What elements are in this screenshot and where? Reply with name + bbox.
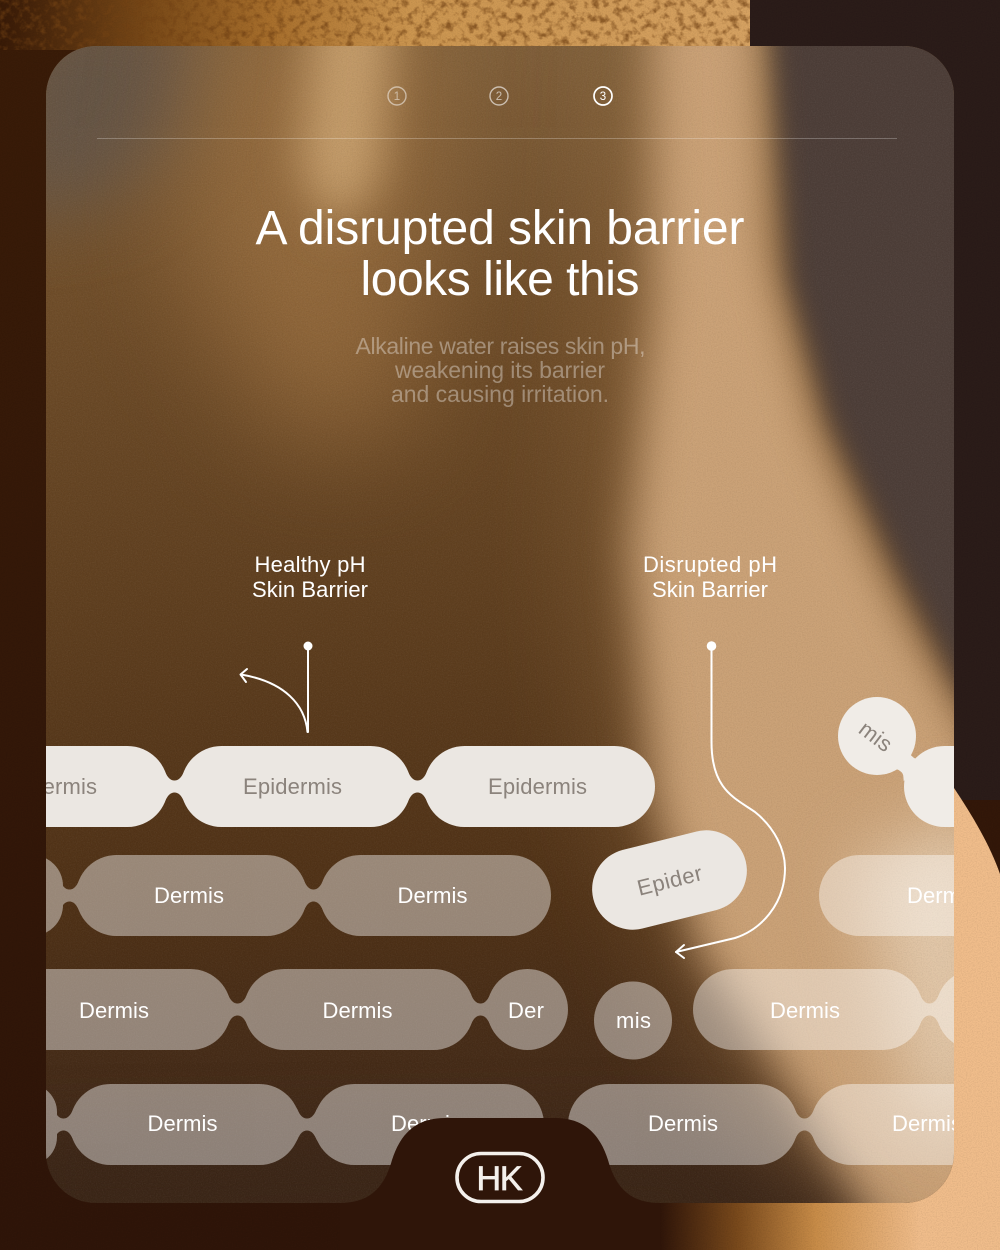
step indicator [388, 87, 612, 105]
label: disrupted pH [644, 556, 776, 597]
broken epidermis cluster: mis [854, 716, 897, 757]
row 3: dermis pills: Der [508, 998, 544, 1023]
row 1: epidermis pills: Epidermis [0, 774, 97, 799]
subtitle [356, 333, 646, 407]
detached epidermis pill: Epider [635, 860, 705, 901]
label: healthy pH: Healthy pH [254, 552, 366, 577]
row 4: dermis pills [0, 1084, 1000, 1165]
broken epidermis cluster [838, 697, 954, 827]
arrow: healthy barrier deflects [240, 642, 312, 732]
title: A disrupted skin barrier [256, 202, 745, 255]
row 1: epidermis pills: Epidermis [243, 774, 342, 799]
logo: HK: HK [476, 1160, 523, 1198]
bottom tab with logo [340, 1118, 660, 1250]
row 3: dermis pills: Dermis [322, 998, 392, 1023]
row 1: epidermis pills: Epidermis [488, 774, 587, 799]
step 1: 1 [394, 91, 400, 103]
label: healthy pH [253, 556, 368, 597]
step 3 [594, 87, 612, 105]
step 2: 2 [496, 91, 502, 103]
row 1: epidermis pills [0, 746, 655, 827]
row 2: dermis pills: Dermis [907, 883, 977, 908]
row 4: dermis pills: Dermis [648, 1111, 718, 1136]
row 3: dermis pills: Dermis [79, 998, 149, 1023]
arrow: disrupted barrier penetrates [676, 641, 785, 958]
row 4: dermis pills: Dermis [391, 1111, 461, 1136]
row 2: dermis pills: Dermis [398, 883, 468, 908]
row 3: dermis pills: Dermis [770, 998, 840, 1023]
title: looks like this [360, 253, 640, 306]
label: healthy pH: Skin Barrier [252, 577, 368, 602]
row 3: dermis pills: mis [616, 1008, 651, 1033]
row 4: dermis pills: Dermis [148, 1111, 218, 1136]
subtitle: weakening its barrier [394, 357, 605, 383]
step 2 [490, 87, 508, 105]
title [256, 209, 744, 296]
label: disrupted pH: Disrupted pH [643, 552, 777, 577]
row 3: dermis pills [0, 969, 1000, 1060]
step 3: 3 [600, 91, 606, 103]
subtitle: and causing irritation. [391, 381, 609, 407]
row 2: dermis pills: Dermis [154, 883, 224, 908]
detached epidermis pill [592, 830, 747, 930]
subtitle: Alkaline water raises skin pH, [356, 333, 646, 359]
label: disrupted pH: Skin Barrier [652, 577, 768, 602]
logo: HK [457, 1154, 543, 1202]
step 1 [388, 87, 406, 105]
row 2: dermis pills [0, 855, 1000, 936]
row 4: dermis pills: Dermis [892, 1111, 962, 1136]
